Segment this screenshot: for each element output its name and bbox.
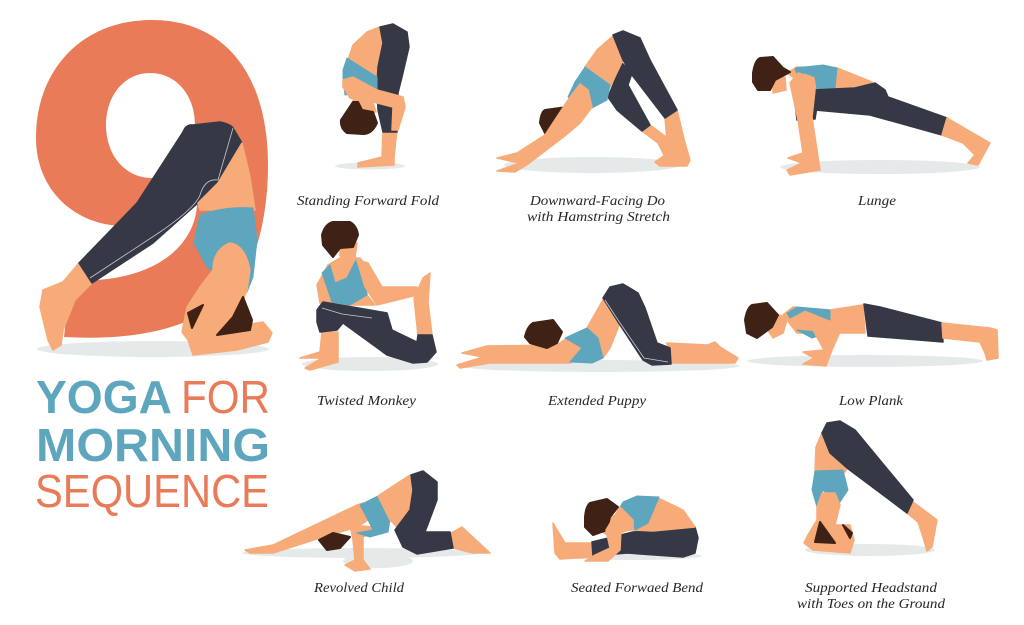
figure: extended puppy (457, 284, 740, 372)
caption: top row: Downward-Facing Do (529, 193, 665, 208)
caption: bottom row: Revolved Child (313, 580, 404, 595)
caption: top row: with Hamstring Stretch (527, 209, 670, 224)
title: FOR (181, 371, 270, 423)
figure: twisted monkey (300, 222, 438, 371)
title (35, 371, 270, 517)
caption: bottom row: with Toes on the Ground (797, 596, 945, 611)
title: YOGA (36, 371, 172, 423)
caption: middle row (317, 393, 904, 408)
figure: low plank (745, 303, 998, 367)
caption: bottom row: Seated Forwaed Bend (571, 580, 703, 595)
figure: downward-facing dog (497, 31, 690, 173)
figure: seated forward bend (553, 496, 702, 561)
figure: small supported headstand (804, 421, 937, 556)
caption: top row: Standing Forward Fold (297, 193, 439, 208)
caption: bottom row (313, 580, 945, 611)
caption: middle row: Low Plank (838, 393, 904, 408)
caption: middle row: Twisted Monkey (317, 393, 416, 408)
big number 9 (36, 20, 268, 338)
caption: top row (297, 193, 896, 224)
figure: revolved child (242, 471, 490, 571)
caption: top row: Lunge (857, 193, 896, 208)
figure: standing forward fold (335, 24, 409, 170)
figure: lunge (753, 57, 990, 175)
caption: bottom row: Supported Headstand (805, 580, 937, 595)
title: MORNING (36, 419, 270, 471)
caption: middle row: Extended Puppy (547, 393, 646, 408)
figure: supported headstand large (37, 122, 272, 357)
title: SEQUENCE (35, 465, 269, 517)
